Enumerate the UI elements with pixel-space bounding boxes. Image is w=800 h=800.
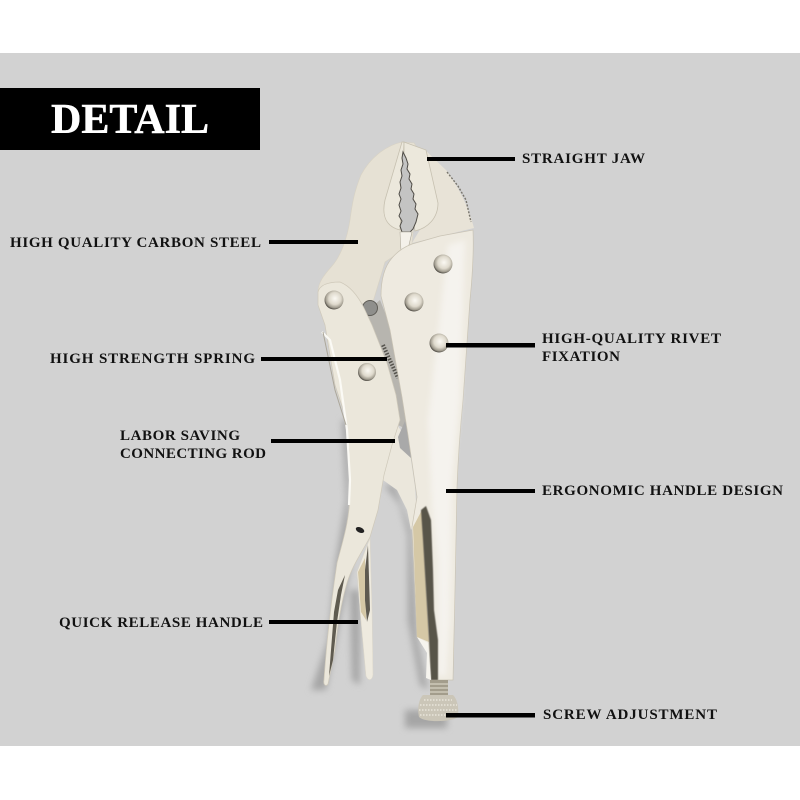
callout: straight jaw: STRAIGHT JAW xyxy=(522,151,645,167)
handle release hole xyxy=(355,526,365,534)
jaw insets xyxy=(384,142,404,230)
right jaw xyxy=(412,150,474,243)
title banner: DETAIL xyxy=(51,97,209,143)
spring recess xyxy=(363,300,408,430)
callout: quick release xyxy=(59,615,358,631)
adjustment screw xyxy=(430,680,448,697)
jaw gap with teeth xyxy=(399,152,418,232)
lever dark stripe xyxy=(365,545,370,622)
callout: rivet fixation: FIXATION xyxy=(542,349,620,365)
pliers shadow xyxy=(311,420,447,728)
callout: screw adjustment xyxy=(446,707,717,723)
callout: screw adjustment: SCREW ADJUSTMENT xyxy=(543,707,717,723)
jaw neck xyxy=(400,232,412,252)
lever brass xyxy=(358,558,366,620)
handle flange xyxy=(322,332,350,505)
rod opening xyxy=(398,421,412,459)
rivets xyxy=(434,254,452,274)
product: locking pliers xyxy=(311,142,474,728)
callout: connecting rod xyxy=(120,428,395,462)
callout: rivet fixation: HIGH-QUALITY RIVET xyxy=(542,331,721,347)
title banner xyxy=(0,88,260,150)
callout: ergonomic handle: ERGONOMIC HANDLE DESIGN xyxy=(542,483,783,499)
channel end xyxy=(417,637,431,680)
callout: connecting rod: LABOR SAVING xyxy=(120,428,240,444)
upper jaw body xyxy=(318,142,425,305)
callout: rivet fixation xyxy=(446,331,721,365)
callout: connecting rod: CONNECTING ROD xyxy=(120,446,266,462)
fixed handle xyxy=(381,230,473,680)
spring xyxy=(383,345,398,378)
quick release lever xyxy=(357,538,373,680)
handle channel: dark stripe xyxy=(421,506,438,680)
callout: carbon steel: HIGH QUALITY CARBON STEEL xyxy=(10,235,261,251)
movable handle xyxy=(318,282,400,685)
handle dark channel xyxy=(329,575,345,676)
callout: quick release: QUICK RELEASE HANDLE xyxy=(59,615,263,631)
knurled knob xyxy=(418,695,458,721)
handle channel: brass xyxy=(413,510,429,642)
callout: straight jaw xyxy=(427,151,645,167)
right jaw teeth edge xyxy=(447,172,471,222)
connecting rod xyxy=(383,425,417,530)
handle highlight xyxy=(428,240,465,676)
callout: spring xyxy=(50,351,387,367)
callout: spring: HIGH STRENGTH SPRING xyxy=(50,351,255,367)
pin hole xyxy=(362,300,378,316)
